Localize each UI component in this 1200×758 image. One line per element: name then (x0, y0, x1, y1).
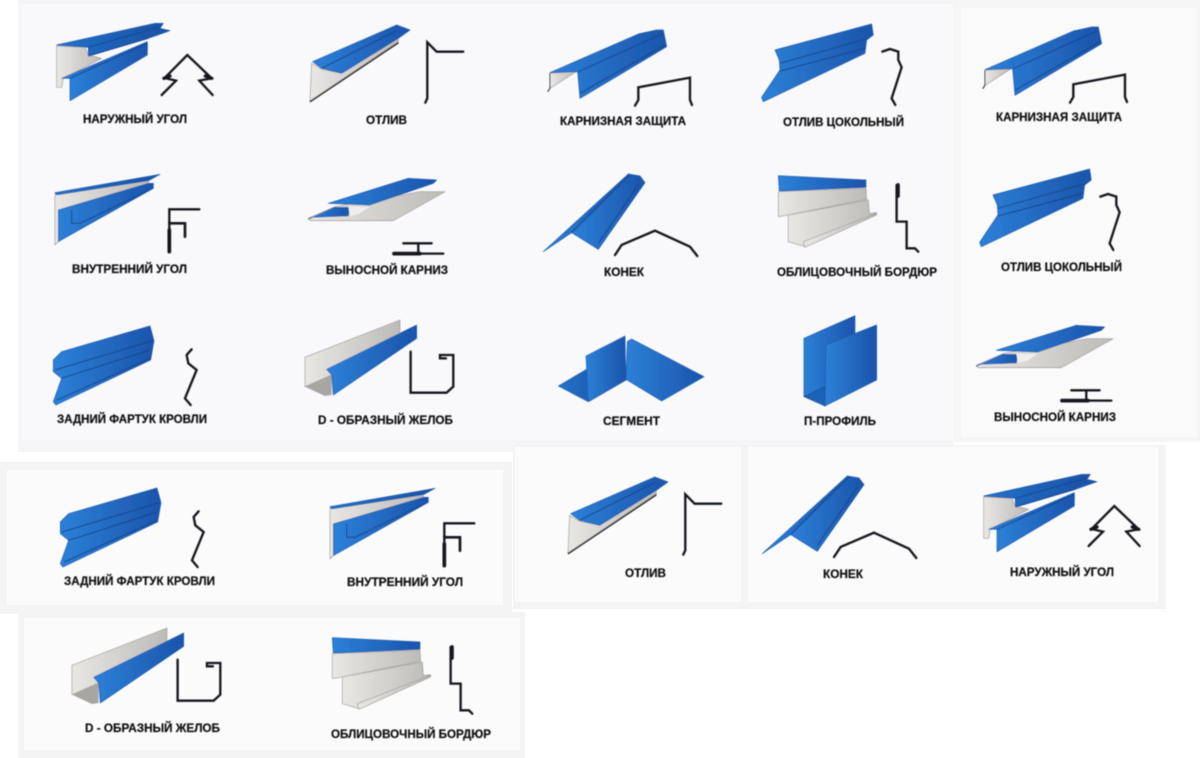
item: внутренний угол (lower) (330, 488, 474, 589)
item: конек (543, 174, 697, 279)
icon: rear apron (60, 488, 161, 567)
item: сегмент (558, 336, 704, 428)
item: п-профиль (804, 316, 877, 428)
panel: lower left second row (24, 618, 520, 750)
icon: rear apron profile (53, 326, 154, 405)
item: отлив цокольный (762, 24, 904, 129)
label: КАРНИЗНАЯ ЗАЩИТА (560, 116, 686, 128)
item: наружный угол (lower) (984, 474, 1140, 579)
icon: facing border section (451, 647, 472, 714)
item: отлив (310, 25, 463, 127)
item: карнизная защита (548, 30, 692, 128)
panel: lower right (748, 447, 1158, 602)
panel: right column (961, 8, 1197, 437)
label: СЕГМЕНТ (603, 416, 660, 428)
item: наружный угол (57, 23, 213, 126)
icon: gutter section (411, 352, 453, 393)
label: ВЫНОСНОЙ КАРНИЗ (326, 264, 448, 277)
icon: inner corner (330, 488, 435, 559)
label: КОНЕК (604, 267, 645, 279)
icon: inner corner section (169, 209, 199, 252)
icon: plinth drip section (1100, 194, 1120, 250)
icon: inner corner profile (55, 174, 160, 245)
label: НАРУЖНЫЙ УГОЛ (83, 113, 187, 126)
icon: ridge (762, 476, 864, 554)
item: D-образный желоб (305, 320, 453, 427)
label: П-ПРОФИЛЬ (804, 416, 876, 428)
item: внутренний угол (55, 174, 199, 276)
item: выносной карниз (308, 178, 448, 277)
icon: drip section (683, 494, 721, 555)
label: ОТЛИВ ЦОКОЛЬНЫЙ (1001, 261, 1122, 274)
item: выносной карниз (right column) (976, 325, 1116, 424)
label: ВНУТРЕННИЙ УГОЛ (347, 576, 463, 589)
label: ОТЛИВ (366, 115, 407, 127)
icon: outer corner profile (57, 23, 170, 101)
label: ВНУТРЕННИЙ УГОЛ (72, 263, 187, 276)
icon: ridge profile (543, 174, 645, 252)
icon: gutter profile (305, 320, 417, 396)
label: ОБЛИЦОВОЧНЫЙ БОРДЮР (331, 728, 491, 741)
item: отлив цокольный (right column) (980, 169, 1122, 274)
icon: drip profile (310, 25, 410, 102)
icon: eave guard section (1070, 75, 1127, 103)
icon: eave guard profile (548, 30, 667, 98)
icon: outer corner section (1089, 506, 1140, 546)
icon: rear apron section (185, 349, 197, 405)
icon: rear apron section (192, 511, 204, 567)
label: ОТЛИВ ЦОКОЛЬНЫЙ (783, 116, 904, 129)
label: КОНЕК (823, 569, 864, 581)
icon: eave guard (983, 27, 1102, 95)
icon: ridge section (615, 231, 697, 256)
icon: inner corner section (444, 523, 474, 566)
label: D - ОБРАЗНЫЙ ЖЕЛОБ (85, 722, 220, 735)
label: НАРУЖНЫЙ УГОЛ (1010, 566, 1114, 579)
label: ОТЛИВ (625, 568, 666, 580)
icon: outer corner (984, 474, 1097, 552)
icon: overhang eave profile (308, 178, 445, 221)
item: облицовочный бордюр (bottom) (331, 638, 491, 741)
icon: U profile (804, 316, 877, 406)
label: КАРНИЗНАЯ ЗАЩИТА (996, 112, 1122, 124)
label: ВЫНОСНОЙ КАРНИЗ (994, 411, 1116, 424)
icon: gutter (72, 628, 184, 704)
icon: outer corner section (162, 55, 213, 95)
item: облицовочный бордюр (777, 176, 937, 279)
label: ОБЛИЦОВОЧНЫЙ БОРДЮР (777, 266, 937, 279)
item: карнизная защита (right column) (983, 27, 1127, 124)
item: задний фартук кровли (lower) (60, 488, 215, 588)
icon: plinth drip (980, 169, 1091, 247)
label: D - ОБРАЗНЫЙ ЖЕЛОБ (318, 414, 453, 427)
item: задний фартук кровли (53, 326, 207, 426)
icon: drip section (425, 42, 463, 103)
icon: overhang eave section (1062, 390, 1111, 401)
icon: overhang eave (976, 325, 1113, 368)
label: ЗАДНИЙ ФАРТУК КРОВЛИ (64, 575, 215, 588)
icon: drip (568, 477, 668, 554)
item: D-образный желоб (bottom) (72, 628, 220, 735)
icon: gutter section (178, 660, 220, 701)
icon: plinth drip profile (762, 24, 873, 102)
item: отлив (lower) (568, 477, 721, 580)
panel: lower left (7, 470, 503, 605)
icon: facing border section (897, 185, 918, 252)
panel: lower centre (515, 447, 741, 602)
icon: eave guard section (635, 78, 692, 106)
icon: segment (558, 336, 704, 402)
item: конек (lower) (762, 476, 916, 581)
icon: plinth drip section (882, 49, 902, 105)
icon: ridge section (834, 533, 916, 558)
icon: facing border (332, 638, 431, 709)
icon: facing border profile (778, 176, 877, 247)
icon: overhang eave section (394, 243, 443, 254)
panel: main catalogue (22, 4, 953, 440)
label: ЗАДНИЙ ФАРТУК КРОВЛИ (57, 413, 207, 426)
